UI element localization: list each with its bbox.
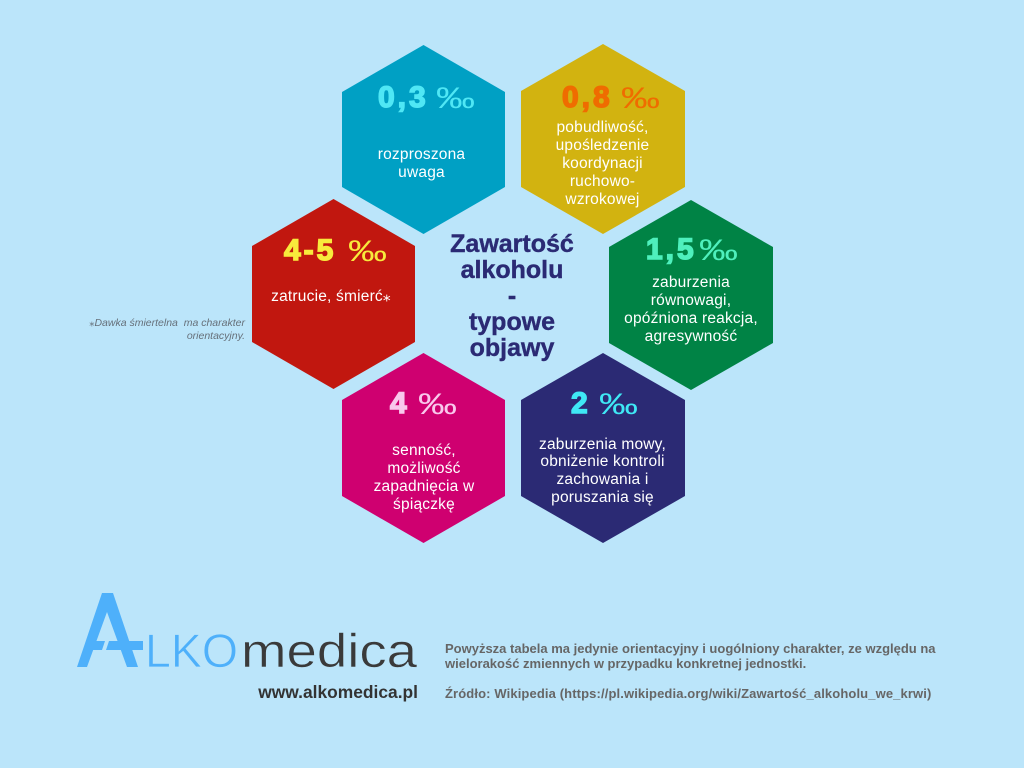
description: pobudliwość: wzrokowej [564,191,640,208]
hexagon: 0,3 promila [342,45,505,234]
disclaimer and source: wielorakość zmiennych w przypadku konkretnej jednostki. [444,656,806,671]
value: 4-5: ‰ [348,235,387,268]
description: pobudliwość: koordynacji [562,155,643,172]
value: 1,5: ‰ [699,234,738,267]
logo icon: letter A with plus [77,593,143,667]
description: zaburzenia mowy: poruszania się [551,489,654,506]
hexagon: 2 promile [521,353,685,543]
logo wordmark medica: medica [241,624,418,677]
central title: typowe [469,308,555,336]
description: zaburzenia równowagi: równowagi, [651,292,731,309]
disclaimer and source: Powyższa tabela ma jedynie orientacyjny i uogólniony charakter, ze względu na [445,641,936,656]
website address: www.alkomedica.pl [257,682,418,702]
hexagon: 0,8 promila [521,44,685,234]
central title: - [508,282,516,310]
value: 0,3 [378,81,475,115]
footnote: orientacyjny. [187,330,245,342]
value: 4: 4 [390,387,410,420]
disclaimer and source: Źródło: Wikipedia (https://pl.wikipedia.org/wiki/Zawartość_alkoholu_we_krwi) [445,686,931,701]
description: zaburzenia równowagi: zaburzenia [652,274,730,291]
description: zaburzenia mowy: zaburzenia mowy, [539,436,666,453]
central title: Zawartość [450,230,574,258]
description: pobudliwość: ruchowo- [570,173,635,190]
value: 1,5: 1,5 [646,233,697,266]
description: pobudliwość: pobudliwość, [556,119,649,136]
central title: alkoholu [461,256,563,284]
value: 4 [390,387,457,421]
footnote: ⁎Dawka śmiertelna ma charakter [89,317,245,329]
central title: objawy [470,334,554,362]
value: 2: ‰ [599,388,638,421]
description: rozproszona uwaga: uwaga [398,164,445,181]
description: zatrucie, śmierć: zatrucie, śmierć⁎ [271,288,391,305]
value: 4-5 [284,234,387,268]
value: 2: 2 [571,387,591,420]
description: rozproszona uwaga: rozproszona [378,146,465,163]
description: zaburzenia równowagi: agresywność [645,328,737,345]
description: senność: możliwość [387,460,461,477]
value: 4-5: 4-5 [284,234,336,267]
description: senność: senność, [392,442,456,459]
description: senność: śpiączkę [393,496,455,513]
description: zaburzenia mowy: obniżenie kontroli [540,453,665,470]
logo wordmark LKO: LKO [145,624,238,677]
hexagon: 4 promile [342,353,505,543]
value: 0,8 [562,81,660,115]
value: 0,3: ‰ [436,82,475,115]
value: 2 [571,387,638,421]
hexagon: 4-5 promila [252,199,415,389]
value: 1,5 [646,233,738,267]
value: 0,8: ‰ [621,82,660,115]
description: pobudliwość: upośledzenie [556,137,649,154]
hexagon: 1,5 promila [609,200,773,390]
logo: Alkomedica [77,593,418,677]
value: 4: ‰ [418,388,457,421]
value: 0,8: 0,8 [562,81,613,114]
value: 0,3: 0,3 [378,81,429,114]
description: zaburzenia równowagi: opóźniona reakcja, [624,310,758,327]
description: senność: zapadnięcia w [374,478,475,495]
description: zaburzenia mowy: zachowania i [556,471,649,488]
